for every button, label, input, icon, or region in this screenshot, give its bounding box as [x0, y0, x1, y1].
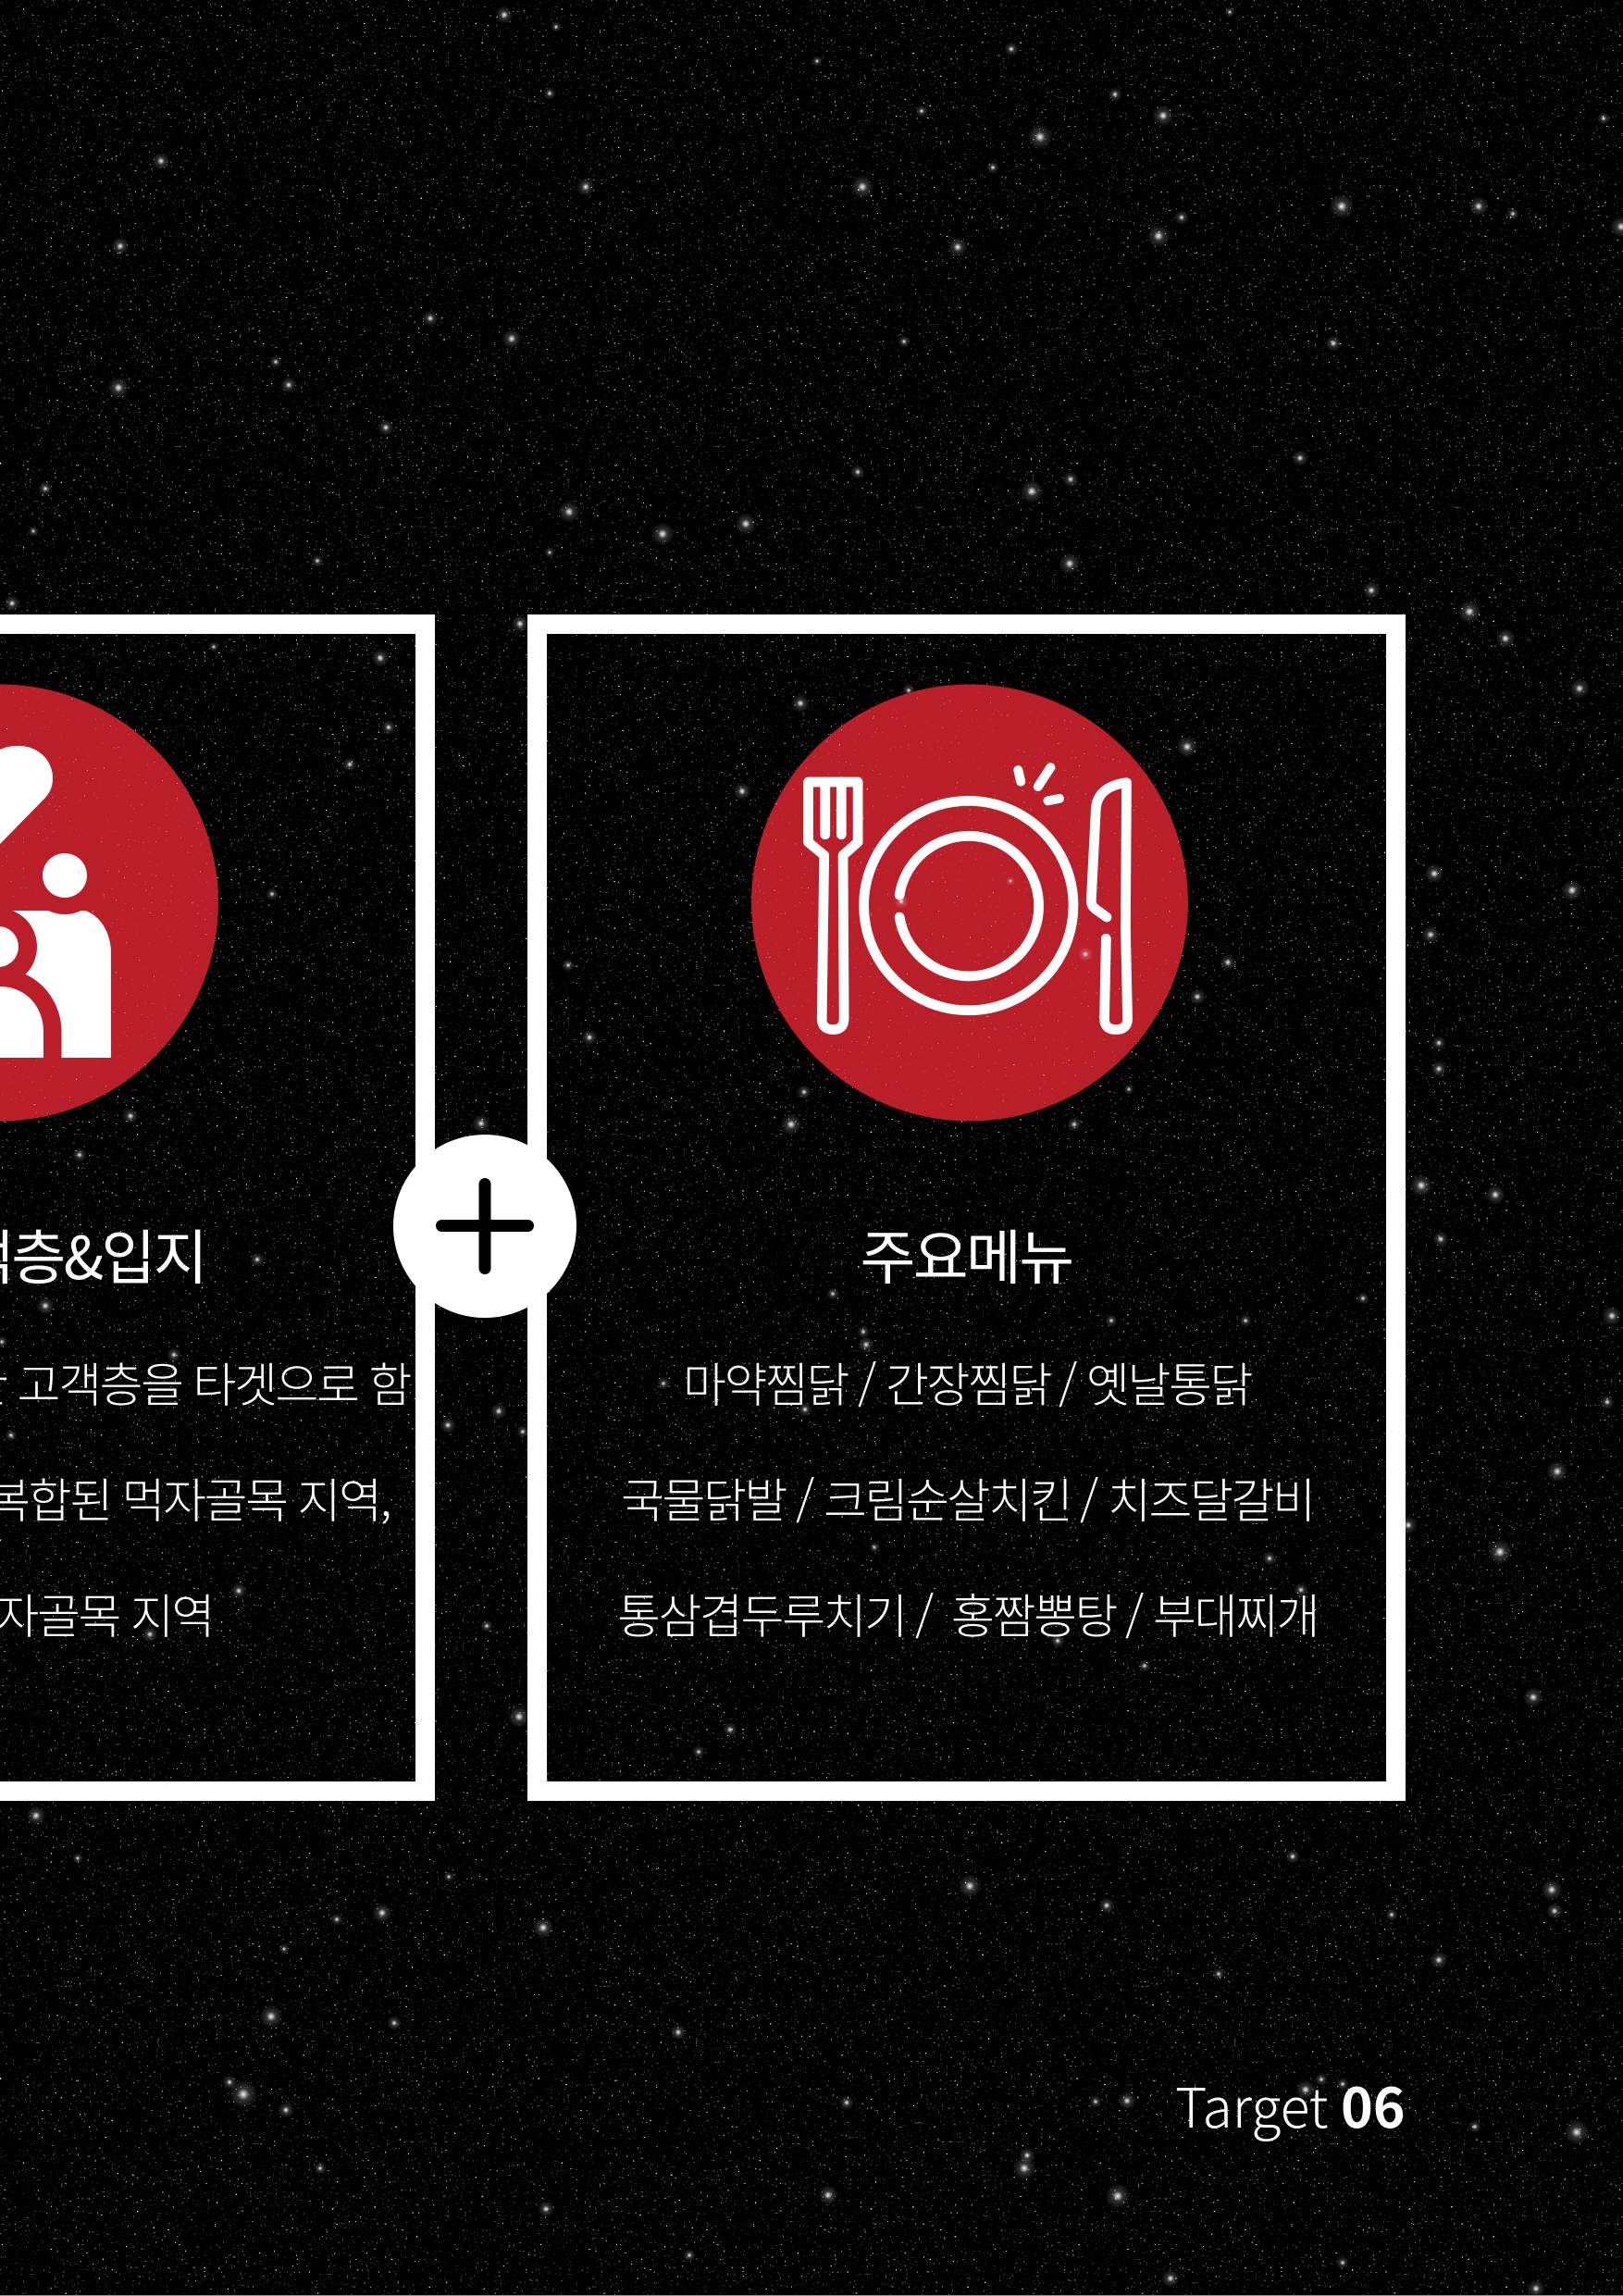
icon: red circle with plate and cutlery — [750, 684, 1190, 1123]
text block: menu items: 옛날통닭 — [1086, 1347, 1252, 1416]
text block: menu items: / — [858, 1347, 876, 1416]
text block: menu items: 국물닭발 — [621, 1463, 787, 1532]
text block: menu items: 치즈달갈비 — [1108, 1463, 1314, 1532]
text block: menu items: 부대찌개 — [1153, 1579, 1318, 1647]
text block: menu items: / — [796, 1463, 814, 1532]
text block: menu items: 크림순살치킨 — [824, 1463, 1071, 1532]
text block: menu items: / — [1080, 1463, 1098, 1532]
heading: main menu: 주요메뉴 — [861, 1211, 1072, 1297]
text block: menu items — [617, 1347, 1318, 1647]
text block: menu items: / — [1059, 1347, 1077, 1416]
icon: plus badge — [393, 1135, 576, 1318]
panel: target customers and location (cropped at left edge) — [0, 624, 426, 1792]
panel frame: left — [0, 624, 426, 1792]
text block: menu items: / — [1125, 1579, 1144, 1647]
text block: left panel description — [0, 1347, 410, 1647]
icon: red circle with people — [0, 684, 222, 1123]
footer: page label: 06 — [1341, 2065, 1406, 2143]
text block: menu items: 마약찜닭 — [683, 1347, 849, 1416]
text block: menu items: 간장찜닭 — [886, 1347, 1051, 1416]
panel frame: right — [537, 624, 1395, 1792]
text block: menu items: / — [915, 1579, 934, 1647]
text block: menu items: 홍짬뽕탕 — [951, 1579, 1117, 1647]
text block: menu items: 통삼겹두루치기 — [617, 1579, 906, 1647]
footer: page label: Target — [1175, 2065, 1328, 2143]
panel: main menu — [537, 624, 1395, 1792]
